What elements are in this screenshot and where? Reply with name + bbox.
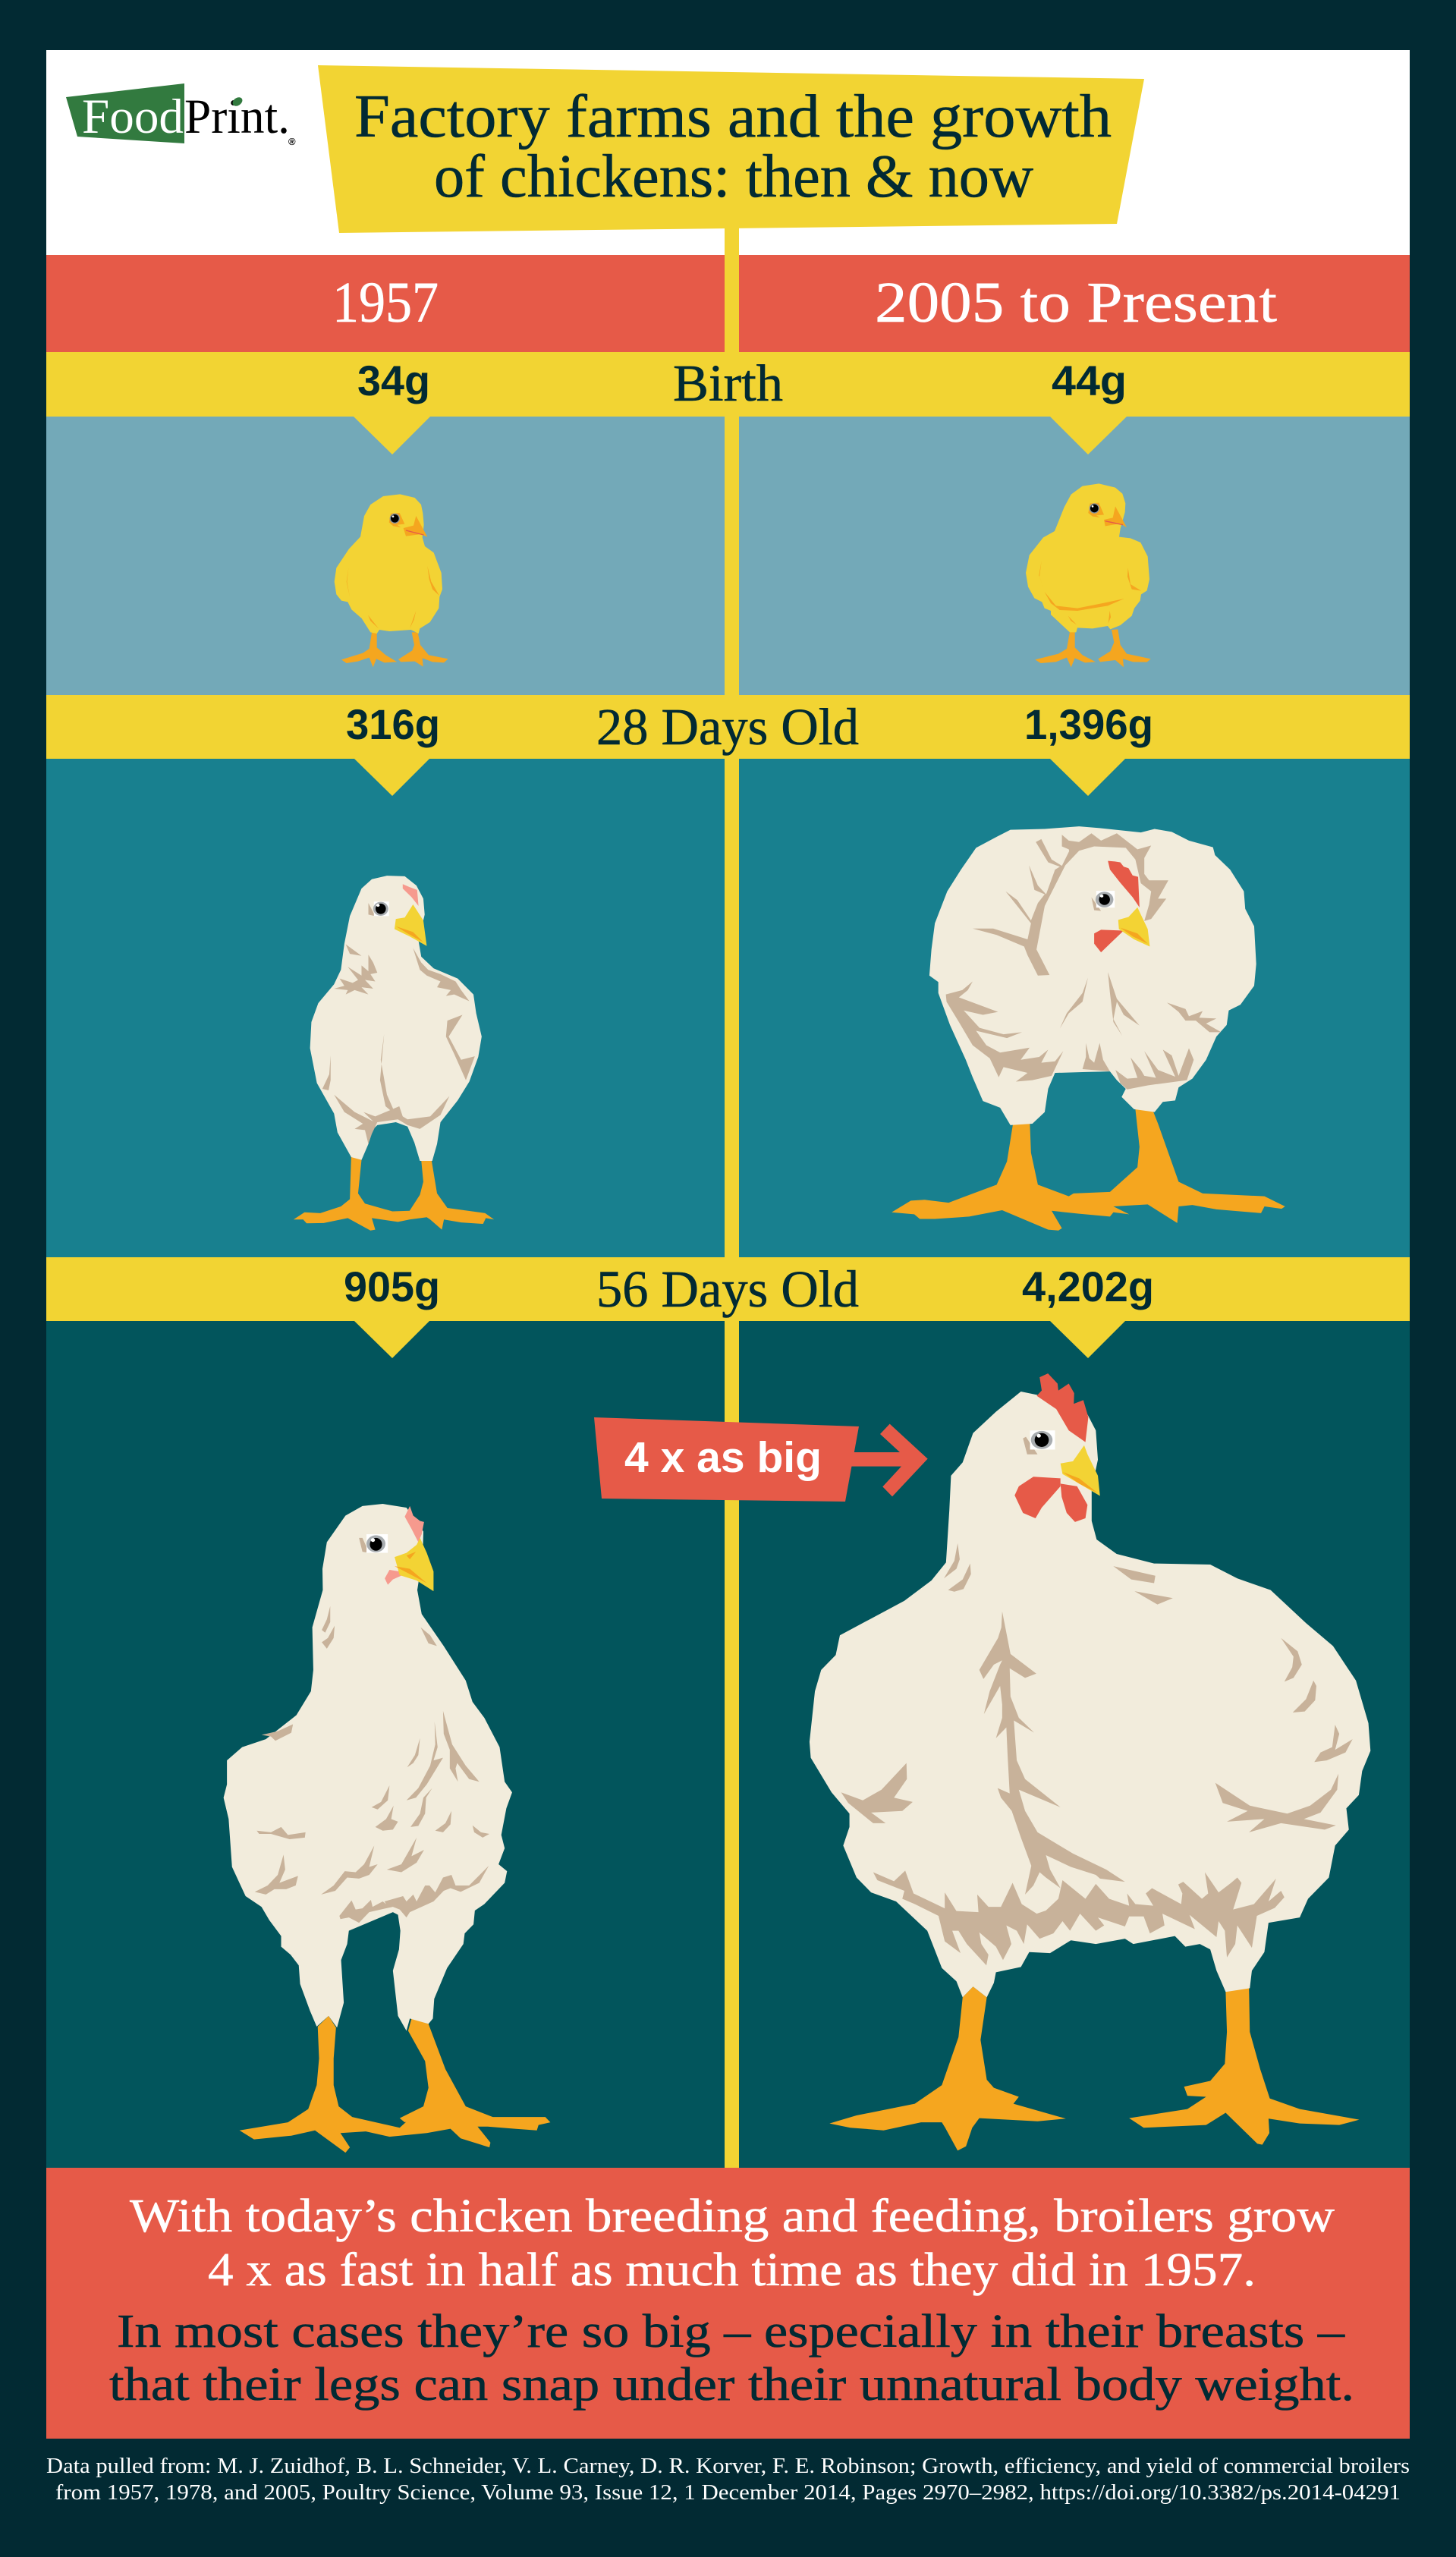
conclusion panel: that their legs can snap under their unnatural body weight.: [109, 2359, 1354, 2411]
center timeline post: [725, 212, 739, 2168]
stage band: 28 days old: 28 Days Old: [596, 698, 859, 756]
source footnote: Data pulled from: M. J. Zuidhof, B. L. Schneider, V. L. Carney, D. R. Korver, F. E. Robinson; Growth, efficiency, and yield of commercial broilers: [46, 2454, 1410, 2478]
conclusion panel: 4 x as fast in half as much time as they did in 1957.: [208, 2244, 1256, 2296]
title banner: of chickens: then & now: [434, 143, 1033, 210]
stage band: 28 days old: 316g: [346, 700, 440, 748]
chicken 1957 at 56 days: [224, 1504, 550, 2153]
header bar: years: 1957: [332, 271, 439, 335]
stage band: 56 days old: [46, 1257, 1410, 1358]
arrow: [847, 1424, 928, 1496]
source footnote: from 1957, 1978, and 2005, Poultry Science, Volume 93, Issue 12, 1 December 2014, Pages 2970–2982, https://doi.org/10.3382/ps.2014-04291: [55, 2480, 1401, 2505]
chicken 2005 at 56 days: [810, 1373, 1370, 2150]
chick 1957 at birth: [335, 494, 448, 667]
header bar: years: 2005 to Present: [875, 271, 1277, 335]
logo: FoodPrint: Print.: [184, 90, 290, 144]
panel: 28 days background: [46, 759, 1410, 1257]
panel: birth background: [46, 417, 1410, 695]
stage band: 28 days old: [46, 695, 1410, 796]
chick 2005 at birth: [1026, 483, 1151, 667]
white header panel: [46, 50, 1410, 255]
callout: 4 x as big with arrow: [594, 1417, 928, 1502]
stage band: birth: 44g: [1052, 357, 1127, 404]
stage band: 28 days old: 1,396g: [1024, 700, 1153, 748]
conclusion panel: With today’s chicken breeding and feeding, broilers grow: [130, 2191, 1335, 2242]
chicken 2005 at 28 days: [892, 826, 1285, 1231]
title banner: [318, 65, 1144, 233]
logo: FoodPrint: ®: [288, 136, 296, 147]
panel: 56 days background: [46, 1321, 1410, 2168]
conclusion panel: In most cases they’re so big – especially in their breasts –: [117, 2306, 1345, 2357]
stage band: 56 days old: 56 Days Old: [596, 1260, 859, 1318]
title banner: Factory farms and the growth: [354, 83, 1112, 150]
logo: FoodPrint: [66, 83, 296, 147]
logo: FoodPrint: Food: [82, 90, 184, 144]
conclusion panel: [46, 2168, 1410, 2439]
stage band: birth: Birth: [673, 354, 783, 412]
chicken 1957 at 28 days: [294, 876, 494, 1231]
header bar: years: [46, 255, 1410, 352]
callout: 4 x as big with arrow: 4 x as big: [624, 1433, 822, 1482]
stage band: 56 days old: 4,202g: [1022, 1263, 1154, 1310]
stage band: birth: [46, 352, 1410, 454]
stage band: birth: 34g: [357, 357, 430, 404]
stage band: 56 days old: 905g: [344, 1263, 440, 1310]
source footnote: [46, 2454, 1410, 2505]
